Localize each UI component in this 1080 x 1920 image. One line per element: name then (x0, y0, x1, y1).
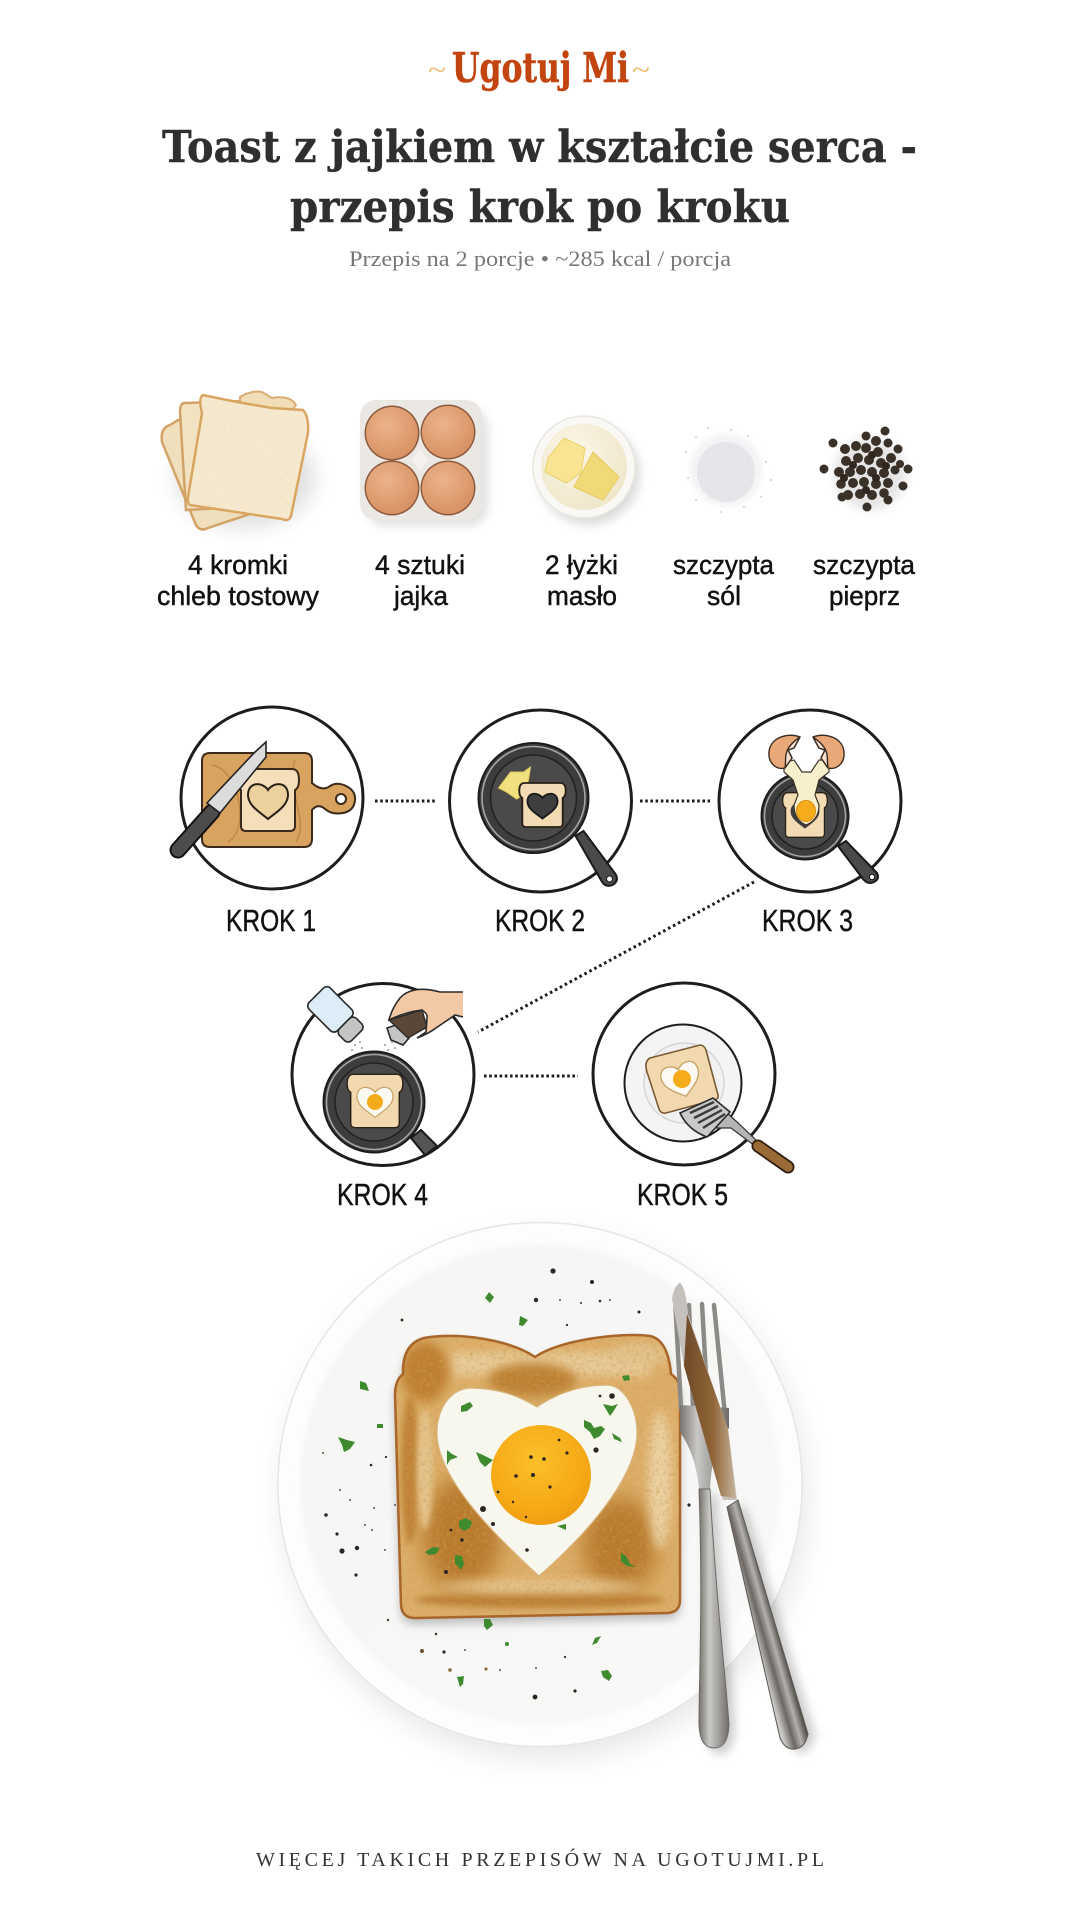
ingredient labels: 4 kromki (188, 550, 288, 580)
ingredient labels: chleb tostowy (157, 581, 319, 611)
icon: pan with toast and egg (324, 1052, 437, 1155)
icon: egg white and yolk falling (784, 760, 829, 825)
step 2 label: KROK 2 (495, 903, 585, 938)
herbs (338, 1292, 636, 1687)
logo: ~ (632, 55, 650, 85)
step 2 (450, 710, 632, 892)
icon: spatula (680, 1098, 788, 1167)
step 1 (178, 707, 363, 889)
icon: pepper (820, 426, 912, 512)
icon: toast (783, 793, 827, 837)
connector: step 3 to step 4 (478, 882, 754, 1032)
knife (672, 1282, 808, 1749)
step 4 (292, 984, 474, 1166)
title (162, 122, 917, 233)
icon: butter bowl (533, 416, 640, 525)
logo: Ugotuj Mi (452, 44, 629, 92)
panel: steps (178, 707, 901, 1212)
ingredient labels: jajka (393, 581, 449, 611)
icon: pepper shaker (387, 1010, 427, 1045)
subtitle: Przepis na 2 porcje • ~285 kcal / porcja (349, 246, 731, 271)
pepper flecks (322, 1268, 691, 1699)
plate shadow (285, 1237, 805, 1757)
icon: knife (178, 742, 266, 850)
step 1 label: KROK 1 (226, 903, 316, 938)
icon: falling seasoning (351, 1041, 396, 1051)
icon: pan (478, 743, 617, 886)
ingredient labels: sól (707, 581, 741, 611)
ingredient labels: masło (547, 581, 617, 611)
toast (392, 1330, 684, 1624)
footer: WIĘCEJ TAKICH PRZEPISÓW NA UGOTUJMI.PL (256, 1847, 824, 1871)
icon: egg shells (769, 735, 844, 768)
icon: cutting board (202, 753, 355, 847)
step 1 connector (375, 800, 437, 802)
cutlery shadow (705, 1495, 816, 1755)
step 4 connector (484, 1074, 578, 1078)
icon: pan (762, 772, 878, 883)
ingredient labels: szczypta (673, 550, 775, 580)
icon: salt shaker (306, 985, 367, 1046)
ingredient labels: pieprz (829, 581, 900, 611)
ingredient labels: 2 łyżki (545, 550, 618, 580)
fork (676, 1304, 729, 1748)
step 4 label: KROK 4 (337, 1177, 428, 1212)
fried egg white in heart shape (437, 1385, 637, 1576)
plate (278, 1222, 802, 1746)
ingredient labels: szczypta (813, 550, 916, 580)
title: Toast z jajkiem w kształcie serca - (162, 122, 917, 173)
logo: ~ (428, 55, 446, 85)
icon: toast with egg (646, 1045, 718, 1113)
panel: finished dish photo (278, 1222, 816, 1757)
icon: toast with heart cutout (237, 769, 299, 831)
step 3 (719, 710, 901, 892)
step 2 connector (640, 800, 710, 802)
icon: egg carton (360, 400, 488, 526)
icon: hand (389, 989, 463, 1038)
icon: toast in pan (519, 783, 566, 827)
step 5 (593, 983, 788, 1167)
egg yolk (491, 1425, 591, 1525)
step 3 label: KROK 3 (762, 903, 853, 938)
ingredient labels: 4 sztuki (375, 550, 465, 580)
ingredient labels (157, 550, 916, 611)
panel: ingredients (157, 392, 916, 611)
icon: salt (685, 427, 772, 513)
icon: bread slices (162, 392, 315, 529)
step 5 label: KROK 5 (637, 1177, 728, 1212)
icon: plate (624, 1024, 742, 1142)
icon: melting butter (498, 767, 530, 799)
title: przepis krok po kroku (290, 182, 790, 233)
